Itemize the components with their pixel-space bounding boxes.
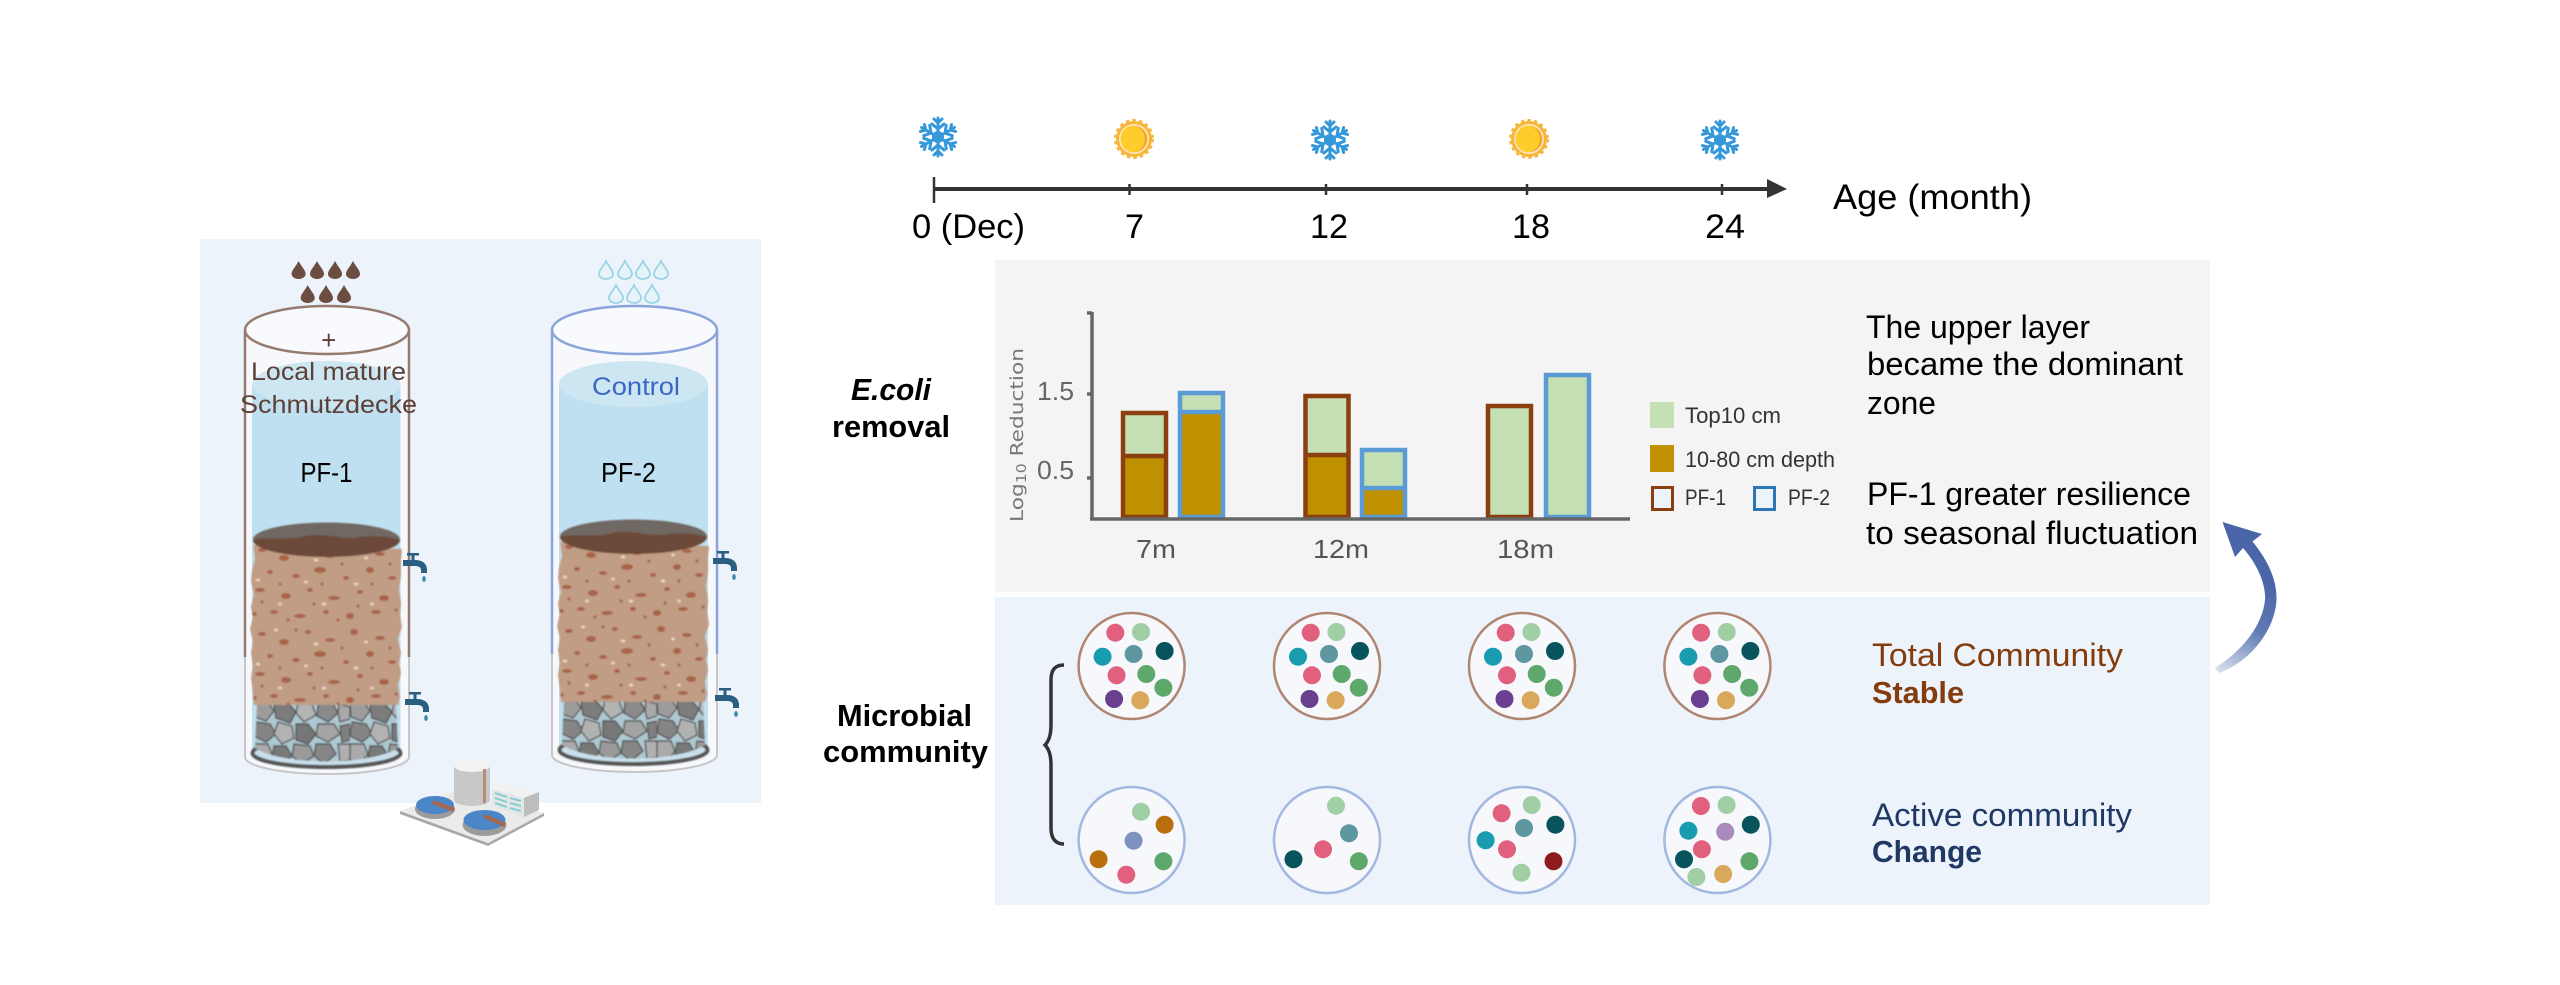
icon: brown influent drops [292,261,360,303]
label: active community change [1872,797,2132,869]
icon: water treatment plant [400,760,544,846]
y axis label: Log [1007,490,1028,522]
bars: 18 months PF-1 and PF-2 [1488,375,1589,517]
heading: E.coli removal: removal [832,409,950,444]
text: resilience finding: to seasonal fluctuation [1866,515,2198,551]
panel: filter setup background [200,239,761,803]
icon: winter snowflake, 12 months [1311,121,1349,159]
chart legend: Top10 cm [1685,403,1781,428]
timeline labels: 24 [1705,208,1745,246]
arrow: microbial community to function [2215,522,2277,673]
heading: microbial community: community [823,734,989,769]
bars: 7 months PF-1 and PF-2 [1123,393,1223,517]
x axis labels: 18m [1497,534,1554,564]
icon: winter snowflake, 24 months [1701,121,1739,159]
axis title: age in months: Age (month) [1833,178,2032,217]
timeline [912,118,2032,246]
timeline axis arrow [934,177,1787,203]
label: plus local mature Schmutzdecke [240,325,417,419]
label: plus local mature Schmutzdecke: Schmutzdecke [240,391,417,419]
x axis labels: 12m [1313,534,1369,564]
timeline labels [912,208,1745,246]
chart legend: PF-1 [1685,485,1726,510]
filter column PF-1 [240,261,429,774]
timeline labels: 18 [1512,208,1550,246]
filter column PF-2 [552,261,739,772]
filter media: sand and gravel [557,520,709,764]
heading: E.coli removal: E.coli [851,372,932,407]
text: upper layer finding: zone [1867,385,1936,421]
text: upper layer finding [1866,309,2183,421]
label: plus local mature Schmutzdecke: + [321,325,336,355]
bars: 12 months PF-1 and PF-2 [1306,396,1405,517]
chart legend: PF-2 [1788,485,1830,510]
icon: clear influent drops [599,261,668,303]
label: Control: Control [592,373,680,401]
icon: upper tap [403,553,427,582]
label: active community change: Active community [1872,797,2132,833]
filter media: sand and gravel [250,522,402,767]
active community circles [1079,787,1770,893]
timeline labels: 0 (Dec) [912,208,1025,246]
heading: microbial community [823,698,989,769]
timeline labels: 7 [1125,208,1144,246]
icon: lower tap [405,692,429,721]
y axis ticks [1037,376,1074,485]
icon: summer sun, 18 months [1511,121,1547,157]
icon: upper tap [713,551,737,580]
label: PF-1: PF-1 [300,457,352,488]
total community circles [1079,613,1770,719]
icon: lower tap [715,688,739,717]
heading: microbial community: Microbial [837,698,972,733]
label: active community change: Change [1872,834,1982,869]
icon: summer sun, 7 months [1116,121,1152,157]
y axis ticks: 0.5 [1037,455,1074,485]
chart legend [1650,402,1835,510]
label: total community stable: Stable [1872,675,1964,710]
y axis label: 10 [1015,463,1030,483]
chart legend: 10-80 cm depth [1685,447,1835,472]
text: upper layer finding: The upper layer [1866,309,2090,345]
bar chart: log reduction [1007,312,1630,564]
text: resilience finding: PF-1 greater resilience [1867,476,2191,512]
label: plus local mature Schmutzdecke: Local mature [251,358,406,386]
heading: E.coli removal [832,372,950,444]
x axis labels [1136,534,1554,564]
label: total community stable: Total Community [1872,637,2123,673]
brace [1045,665,1064,844]
timeline labels: 12 [1310,208,1348,246]
icon: winter snowflake, 0 months [919,118,957,156]
text: resilience finding [1866,476,2198,551]
text: upper layer finding: became the dominant [1867,346,2183,382]
panel: microbial community [995,597,2210,905]
x axis labels: 7m [1136,534,1176,564]
y axis label: Reduction [1007,348,1028,463]
panel: E. coli removal [995,260,2210,592]
label: PF-2: PF-2 [601,457,656,488]
y axis ticks: 1.5 [1037,376,1074,406]
label: total community stable [1872,637,2123,710]
